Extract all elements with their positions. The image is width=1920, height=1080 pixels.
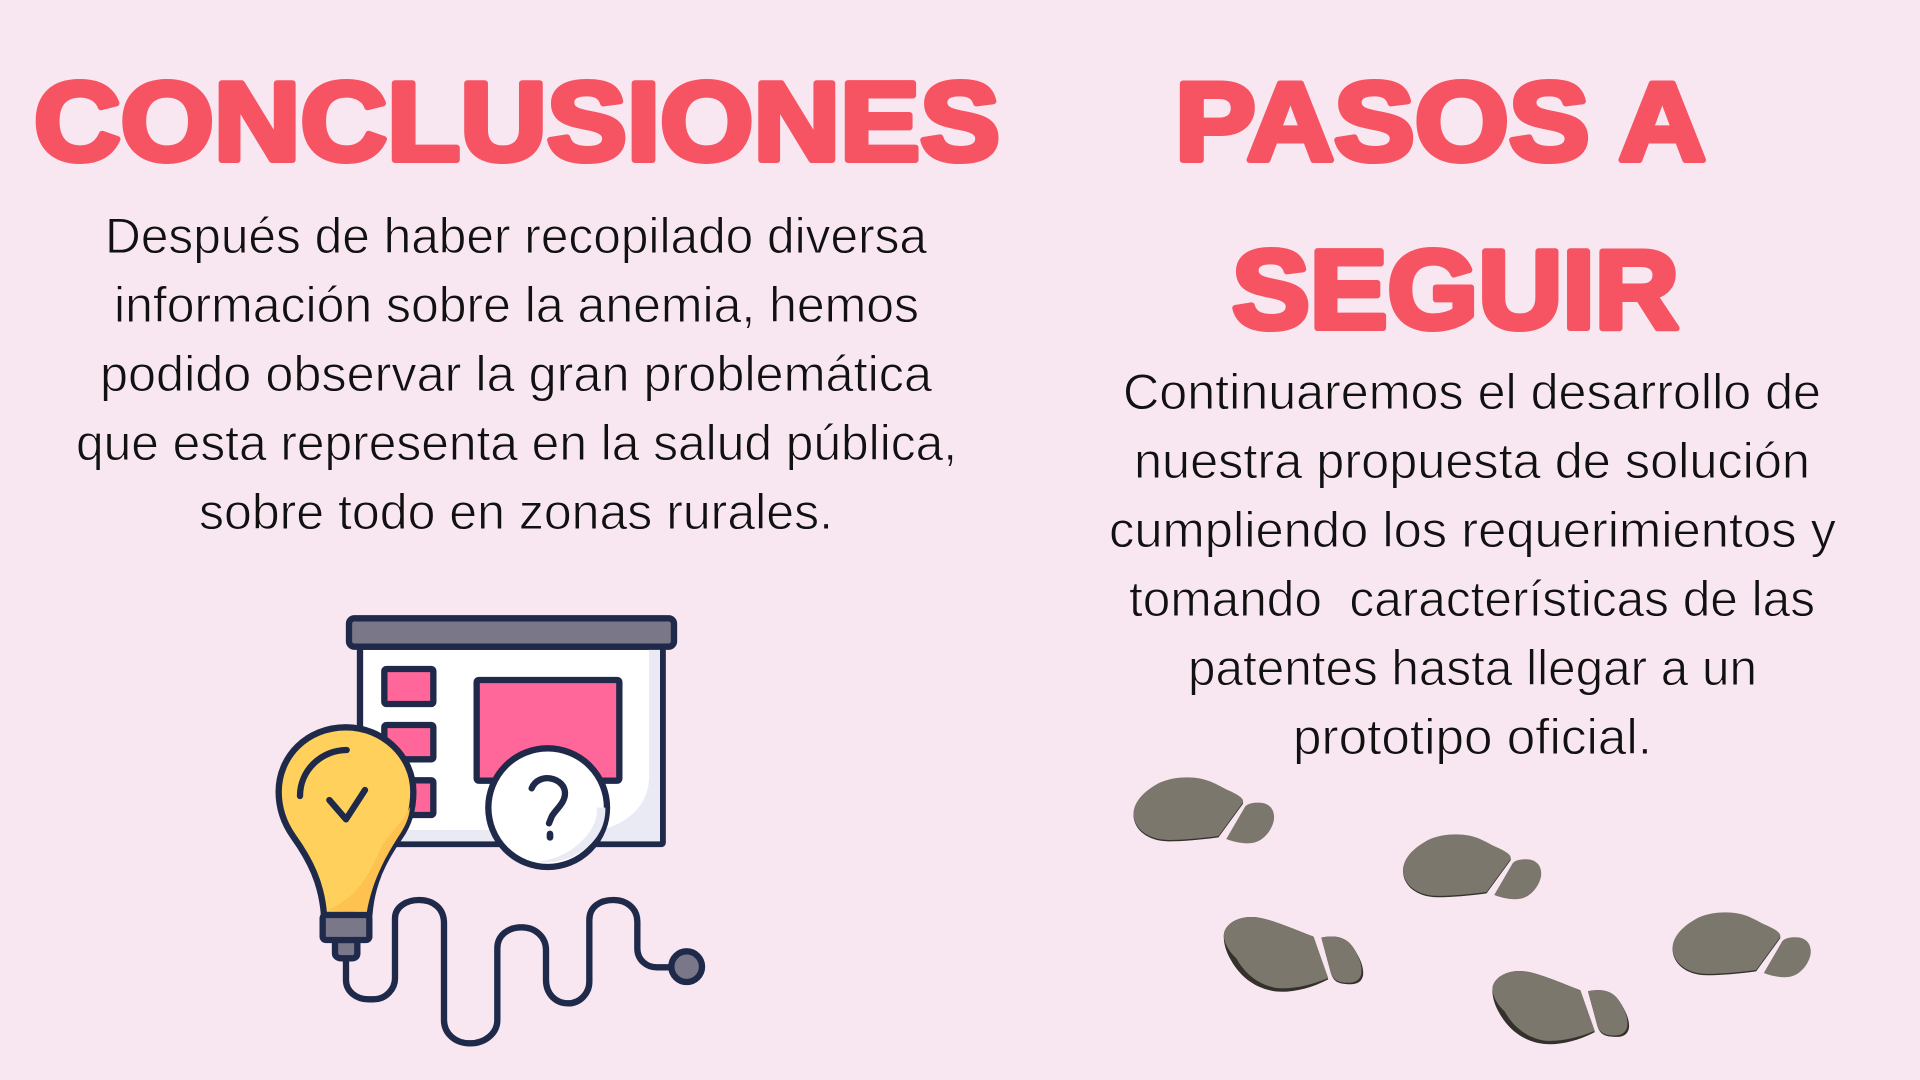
- text block: pasos a seguir body: patentes hasta llegar a un: [1188, 640, 1757, 696]
- text block: pasos a seguir body: tomando características de las: [1129, 571, 1815, 627]
- text block: pasos a seguir body: cumpliendo los requerimientos y: [1109, 502, 1836, 558]
- text block: pasos a seguir body: Continuaremos el desarrollo de: [1123, 364, 1821, 420]
- heading: pasos a seguir: [1175, 60, 1706, 352]
- panel: conclusiones: [34, 60, 1000, 1043]
- icon: presentation screen with light bulb and question mark: [276, 615, 706, 1046]
- heading: pasos a seguir: SEGUIR: [1232, 228, 1679, 352]
- text block: conclusiones body: que esta representa en la salud pública,: [76, 415, 957, 471]
- text block: conclusiones body: sobre todo en zonas rurales.: [199, 484, 833, 540]
- text block: pasos a seguir body: prototipo oficial.: [1293, 709, 1652, 765]
- heading: conclusiones: CONCLUSIONES: [34, 60, 1000, 184]
- heading: pasos a seguir: PASOS A: [1175, 60, 1706, 184]
- text block: pasos a seguir body: [1109, 364, 1836, 765]
- text block: conclusiones body: [76, 208, 957, 540]
- text block: conclusiones body: podido observar la gran problemática: [100, 346, 932, 402]
- text block: conclusiones body: Después de haber recopilado diversa: [105, 208, 927, 264]
- text block: conclusiones body: información sobre la anemia, hemos: [114, 277, 919, 333]
- panel: pasos a seguir: [1109, 60, 1836, 1044]
- text block: pasos a seguir body: nuestra propuesta de solución: [1134, 433, 1810, 489]
- icon: footprints: [1134, 777, 1811, 1044]
